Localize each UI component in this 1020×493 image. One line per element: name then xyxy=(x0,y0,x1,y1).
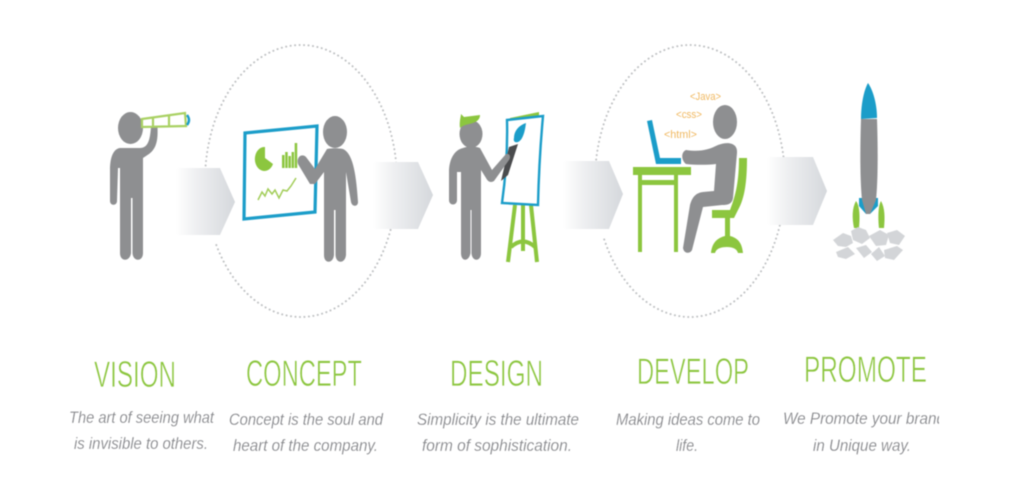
step: develop text: Making ideas come to xyxy=(616,410,760,429)
step: promote text xyxy=(783,349,945,455)
icon: rocket launch xyxy=(833,83,905,261)
step: promote text: in Unique way. xyxy=(813,436,911,455)
step: design text xyxy=(417,353,579,455)
step: design text: Simplicity is the ultimate xyxy=(417,410,579,429)
icon: developer at desk xyxy=(633,91,747,253)
step: develop text xyxy=(616,351,760,455)
step: vision text xyxy=(69,354,215,453)
dotted circle: concept xyxy=(190,45,397,317)
step: develop text: DEVELOP xyxy=(637,351,749,392)
step: vision text: is invisible to others. xyxy=(74,434,208,453)
smoke clouds xyxy=(833,227,905,261)
icon: person with telescope xyxy=(110,112,189,260)
code labels xyxy=(664,91,721,141)
code labels: <Java> xyxy=(690,91,721,103)
dotted circle: develop xyxy=(582,45,785,317)
step: vision text: VISION xyxy=(94,354,176,395)
step: concept text: CONCEPT xyxy=(246,353,362,394)
arrow: concept to design xyxy=(373,162,433,229)
icon: person presenting at chart board xyxy=(244,116,358,262)
infographic: five step process xyxy=(70,44,940,455)
step: develop text: life. xyxy=(676,436,698,455)
step: vision text: The art of seeing what xyxy=(69,408,215,427)
step: design text: form of sophistication. xyxy=(422,436,572,455)
arrow: design to develop xyxy=(563,161,623,229)
icon: painter at easel xyxy=(449,112,543,262)
step: concept text: heart of the company. xyxy=(233,436,378,455)
code labels: <css> xyxy=(676,109,702,121)
arrow: vision to concept xyxy=(176,168,235,235)
step: concept text xyxy=(229,353,383,455)
step: promote text: We Promote your brand xyxy=(783,409,945,428)
step: promote text: PROMOTE xyxy=(804,349,927,390)
arrow: develop to promote xyxy=(767,157,827,225)
step: design text: DESIGN xyxy=(450,353,543,394)
step: concept text: Concept is the soul and xyxy=(229,410,383,429)
code labels: <html> xyxy=(664,129,697,141)
